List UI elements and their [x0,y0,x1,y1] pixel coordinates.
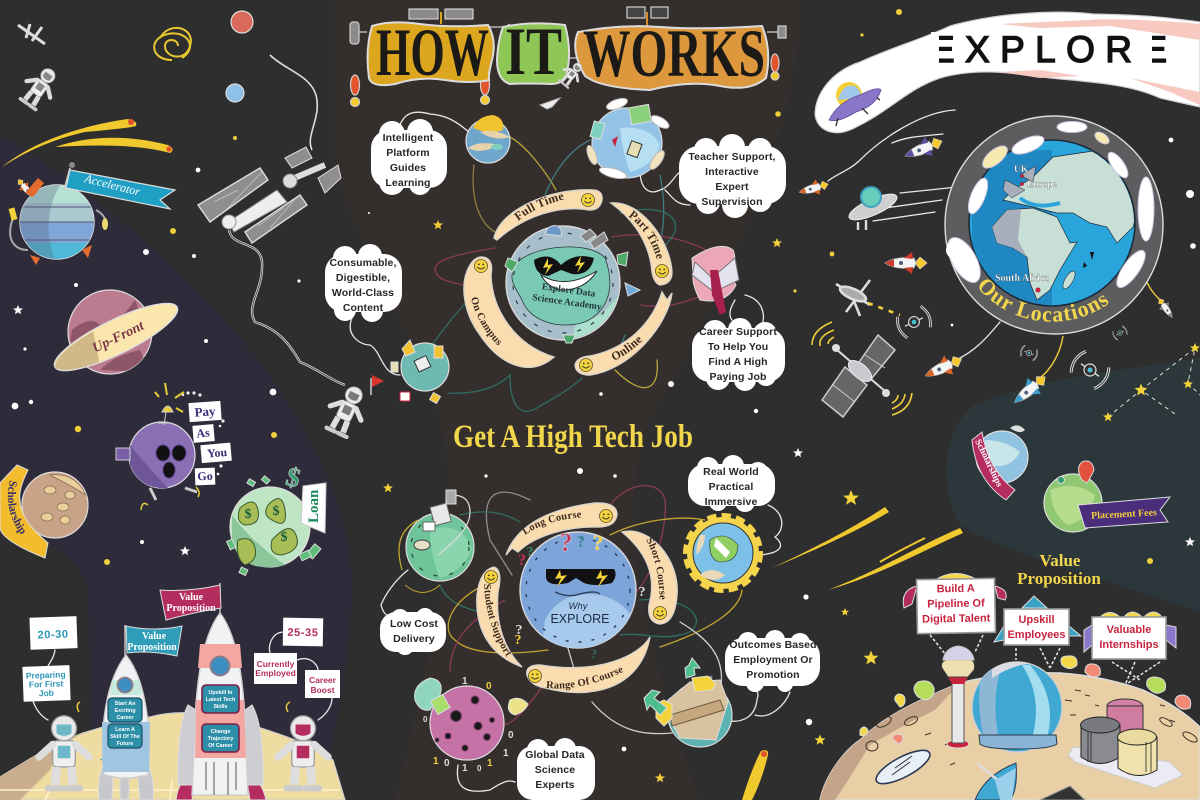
flag: value proposition crimson [160,583,221,620]
control tower [942,646,975,748]
fuel tanks [1068,699,1183,788]
label: preparing for first job: Job [39,688,54,698]
globe ocean [969,140,1135,306]
band: Student Support: Student Support [484,584,511,657]
rocket body [102,655,149,778]
stars [12,138,1196,751]
binary digits: 1 [503,748,509,759]
dome [972,657,1062,752]
icon: orange rocket [921,349,966,385]
band: Full Time: Full Time [514,194,564,221]
satellite dish [975,763,1016,800]
label: preparing for first job: For First [29,678,64,690]
flag: value proposition teal [125,625,182,657]
rocket porthole [210,656,230,676]
land masses [237,499,297,565]
text: Explore Data Science Academy [532,281,604,313]
tag: Loan: Loan [306,489,322,523]
icon: career shirt [692,246,763,325]
planet: global data science [415,676,528,791]
dollar signs: $ [244,507,252,522]
planet shading [526,537,631,648]
icon: question marks: ? [638,585,646,600]
callout: consumable content: World-Class [332,287,394,299]
icon: tiny astronaut and shuttle [540,58,587,109]
tank pink [1107,699,1143,735]
icon: satellite [812,322,912,417]
billboard: build a pipeline: Digital Talent [922,612,991,626]
icon: orange rocket and thrusters [9,176,108,265]
screen: learn a skill of the future: Future [117,741,133,747]
text: why EXPLORE [550,601,610,626]
text: our locations: Our Locations [979,280,1108,322]
planet: content [350,318,449,403]
planet swirls [70,300,150,372]
icon: chart card [629,104,651,125]
screen: start an exciting career: Start An [115,701,135,707]
astronaut: currently employed [278,698,332,788]
text: Explore Data Science Academy: Science Academy [532,293,602,313]
constellation [1103,343,1200,421]
dome panels [979,662,1050,734]
landing disc [872,744,934,790]
callout: intelligent platform: Platform [386,147,430,159]
screen: start an exciting career: Career [116,715,134,721]
flag: value proposition teal: Proposition [127,642,177,653]
icon: data cloud [415,678,528,715]
label: 20-30: 20-30 [37,628,69,642]
background region: purple left [0,135,352,800]
icon: question marks: ? [591,646,597,661]
callout: teacher support: Teacher Support, [688,151,776,163]
band: Full Time [493,189,603,241]
rocket fins [176,705,266,800]
label: preparing for first job: Preparing [26,669,66,681]
rocket: value proposition blue [98,625,182,800]
icon: question marks: ? [518,552,526,569]
billboard: valuable internships [1092,617,1166,659]
screen: upskill in latest tech skills: Skills [213,704,228,710]
band: Short Course [620,530,678,625]
icon: tie craft [894,305,934,339]
screen: start an exciting career [108,698,142,722]
label: 20-30 [29,616,78,650]
icon: green UFO [846,187,900,230]
label: 25-35 [283,618,323,646]
band: Range Of Course [526,636,651,694]
callout: global data science [517,738,595,800]
location labels [995,165,1057,292]
banner: scholarships: Scholarships [972,438,1004,489]
icon: question marks [514,528,646,661]
icon: shuttle [901,131,946,166]
label: career boost: Boost [310,685,335,695]
binary digits: 0 [508,730,514,741]
band: Student Support [476,566,522,668]
screen: upskill in latest tech skills [202,685,239,713]
screen: learn a skill of the future [108,724,142,748]
callout: career support: Paying Job [709,371,767,383]
icon: red rocket [885,252,927,274]
binary digits: 0 [486,681,492,692]
location labels: Europe [1027,180,1057,190]
callout: teacher support: Interactive [705,166,759,178]
binary digits: 0 [477,764,482,773]
band: Part Time [609,202,673,286]
callout: intelligent platform: Guides [390,162,426,174]
callout: low cost delivery [380,608,446,655]
planet: loan [227,461,326,575]
flag: value proposition crimson: Value [179,592,204,603]
callout: outcomes based: Promotion [746,669,800,681]
callout: outcomes based: Outcomes Based [729,639,817,651]
screen: change trajectory of career [202,724,239,752]
planet ring with label: Up-Front [90,318,148,356]
callout: career support [692,318,785,391]
label: Pay: Pay [194,403,216,420]
heading: Get A High Tech Job: Get A High Tech Job [453,419,693,455]
trees [860,656,1191,744]
band: Long Course: Long Course [522,512,582,535]
text: EXPLORE: EXPLORE [930,29,1167,70]
callout: real world [688,455,775,512]
billboard accents [903,574,1176,652]
billboard: upskill employees: Employees [1007,629,1066,641]
billboard: upskill employees [1004,609,1069,645]
face: sunglasses [534,256,597,290]
label: As: As [196,425,211,441]
callout: global data science: Science [535,764,575,776]
moon surface: right [820,656,1200,800]
label: You: You [206,445,228,461]
callout: global data science: Global Data [525,749,585,761]
dollar signs: $ [272,504,280,519]
planet: scholarships (right) [972,425,1028,500]
banner: Scholarship: Scholarship [8,480,25,534]
surface texture [866,690,1199,765]
label: preparing for first job [22,665,71,702]
callout: global data science: Experts [535,779,575,791]
planet: teacher support [585,96,690,205]
label: currently employed: Employed [255,668,296,678]
callout: consumable content: Consumable, [329,257,397,269]
screen: learn a skill of the future: Learn A [115,727,135,733]
icon: astronaut [16,62,64,112]
rocket porthole [118,678,132,692]
space station [198,55,345,385]
planet: outcomes based suit [644,658,790,747]
band: Long Course [505,502,618,556]
value proposition heading [1017,551,1101,588]
callout: consumable content: Content [343,302,384,314]
billboard: valuable internships: Internships [1099,639,1159,651]
comets [2,119,963,800]
band: Short Course: Short Course [646,538,664,600]
planet: up-front [54,289,178,375]
face holes [156,445,186,478]
planet: low cost [381,490,474,617]
title text: HOW [376,14,489,90]
top system: central planet [505,226,640,350]
solar array at ground [1040,786,1085,800]
icon: tie fighters [1019,325,1128,391]
icon: question marks: ? [516,623,522,638]
icon: question marks: ? [592,530,604,555]
planet shading and dashes [512,232,618,338]
space vehicles near globe [797,110,1200,421]
orbit lines: top system [432,137,712,411]
callout: intelligent platform: Learning [385,177,431,189]
text: Explore Data Science Academy: Explore Data [541,282,596,300]
band: Online: Online [612,337,642,360]
title: HOW [368,22,494,85]
screen: change trajectory of career: Change [211,729,230,735]
banner: Accelerator [64,162,175,209]
callout: consumable content: Digestible, [336,272,390,284]
label: career boost: Career [309,675,337,685]
astronaut with red flag [321,375,384,440]
callout: teacher support: Supervision [701,196,763,208]
rocket fins [98,752,153,800]
title: HOW IT WORKS [350,7,786,109]
callout: real world: Real World [703,466,759,478]
icon: small spacecraft [18,24,45,44]
callout: teacher support: Expert [715,181,749,193]
icon: drone [836,280,900,316]
rocket body [192,613,248,795]
planet: scholarship [0,464,89,559]
icon: location pin [1078,461,1094,483]
billboard: build a pipeline: Build A [937,583,975,595]
band: On Campus [463,256,556,368]
planet: intelligent platform [400,112,510,163]
background region: teal right [946,358,1200,612]
value proposition heading: Proposition [1017,569,1101,588]
binary digits: 1 [487,758,493,769]
text: why EXPLORE: Why [568,601,589,612]
icon: red planet [231,11,253,33]
flag: value proposition crimson: Proposition [166,603,216,614]
astronaut: preparing [33,701,89,788]
icon: flying notes [227,476,321,575]
label: career boost [305,670,340,698]
callout: outcomes based [725,630,820,692]
title: HOW IT WORKS: IT [505,13,562,89]
screen: start an exciting career: Exciting [115,708,135,714]
icon: purple UFO [829,82,881,126]
icon: antennas and panels [505,226,640,343]
callout: career support: Find A High [708,356,768,368]
callout: consumable content [325,244,402,322]
location labels: South Africa [995,273,1049,284]
binary digits [423,676,514,774]
flag: value proposition teal: Value [142,631,167,642]
face: sunglasses [546,569,616,596]
callout: real world: Practical [709,481,753,493]
billboard: build a pipeline: Pipeline Of [927,597,985,611]
callout: outcomes based: Employment Or [733,654,813,666]
banner: Accelerator: Accelerator [82,171,142,199]
icon: question marks: ? [526,545,534,560]
tank cream [1118,729,1157,776]
dollar signs [244,504,288,545]
callout: teacher support [679,134,786,218]
top-left space objects [16,11,253,112]
icon: small rocket [1154,295,1177,321]
billboards [903,574,1176,685]
callout: career support: Career Support [699,326,777,338]
EXPLORE comet [815,12,1200,133]
screen: change trajectory of career: Of Career [208,743,234,749]
binary digits: 0 [444,758,450,769]
screen: learn a skill of the future: Skill Of The [110,734,140,740]
binary digits: 1 [433,756,439,767]
lower system: why explore planet [514,528,646,661]
location labels: UK [1014,165,1029,175]
binary digits: 0 [423,715,428,724]
binary digits: 1 [462,763,468,774]
callout: intelligent platform [371,119,447,195]
callout: real world: Immersive [705,496,757,508]
planet: pay as you go [116,383,232,510]
value proposition heading: Value [1040,551,1081,570]
dollar signs: $ [280,530,288,545]
screen: change trajectory of career: Trajectory [208,736,233,742]
icon: big dollar: $ [283,461,304,494]
title: IT [497,23,569,84]
title: WORKS [575,26,768,90]
band: Part Time: Part Time [628,210,662,260]
band: Range Of Course: Range Of Course [546,668,624,690]
globe clouds [941,122,1154,292]
decorative dots [182,391,225,475]
globe: our locations [944,115,1164,335]
screen: upskill in latest tech skills: Upskill In [209,690,232,696]
orbit lines: lower system [440,486,742,734]
icon: question marks: ? [577,532,585,551]
text: why EXPLORE: EXPLORE [550,612,610,626]
label: 25-35: 25-35 [287,627,319,639]
callout: career support: To Help You [708,341,768,353]
callout: intelligent platform: Intelligent [383,132,434,144]
planet stripes [20,185,94,260]
globe land [972,150,1150,306]
globe ring [945,116,1163,334]
icon: galaxy [154,28,191,60]
label: currently employed: Currently [257,659,295,669]
screen: upskill in latest tech skills: Latest Tech [206,697,235,703]
label: currently employed [254,653,297,684]
moon surface: left [0,713,345,800]
planet craters [41,475,86,524]
banner: placement fees: Placement Fees [1091,507,1157,522]
billboard: upskill employees: Upskill [1018,614,1055,626]
callout: low cost delivery: Low Cost [390,618,438,630]
big yellow stars [814,490,878,745]
tank grey [1080,717,1120,764]
rocket: value proposition pink [160,583,266,800]
icon: blue planet [226,84,244,102]
billboard: valuable internships: Valuable [1107,624,1151,636]
hover pods and chains [930,635,1160,685]
icon: chevron badges [692,676,716,692]
planet: placement fees [1044,461,1170,532]
background band: centre [335,0,800,800]
icon: question marks: ? [560,528,572,557]
title hardware [350,7,786,106]
icon: question marks: ? [514,633,522,648]
band: On Campus: On Campus [472,297,501,346]
binary digits: 1 [462,676,468,687]
callout: low cost delivery: Delivery [393,633,435,645]
icon: antenna beacon [155,383,184,412]
planet: real world [687,505,782,589]
icon: rocket [797,176,830,200]
icon: blue rocket [1008,369,1052,410]
planet: accelerator [9,162,175,265]
billboard: build a pipeline [917,578,995,634]
band: Online [574,290,673,376]
label boxes: left group [22,616,340,702]
label: Go: Go [197,469,213,483]
title: HOW IT WORKS: WORKS [583,15,765,91]
